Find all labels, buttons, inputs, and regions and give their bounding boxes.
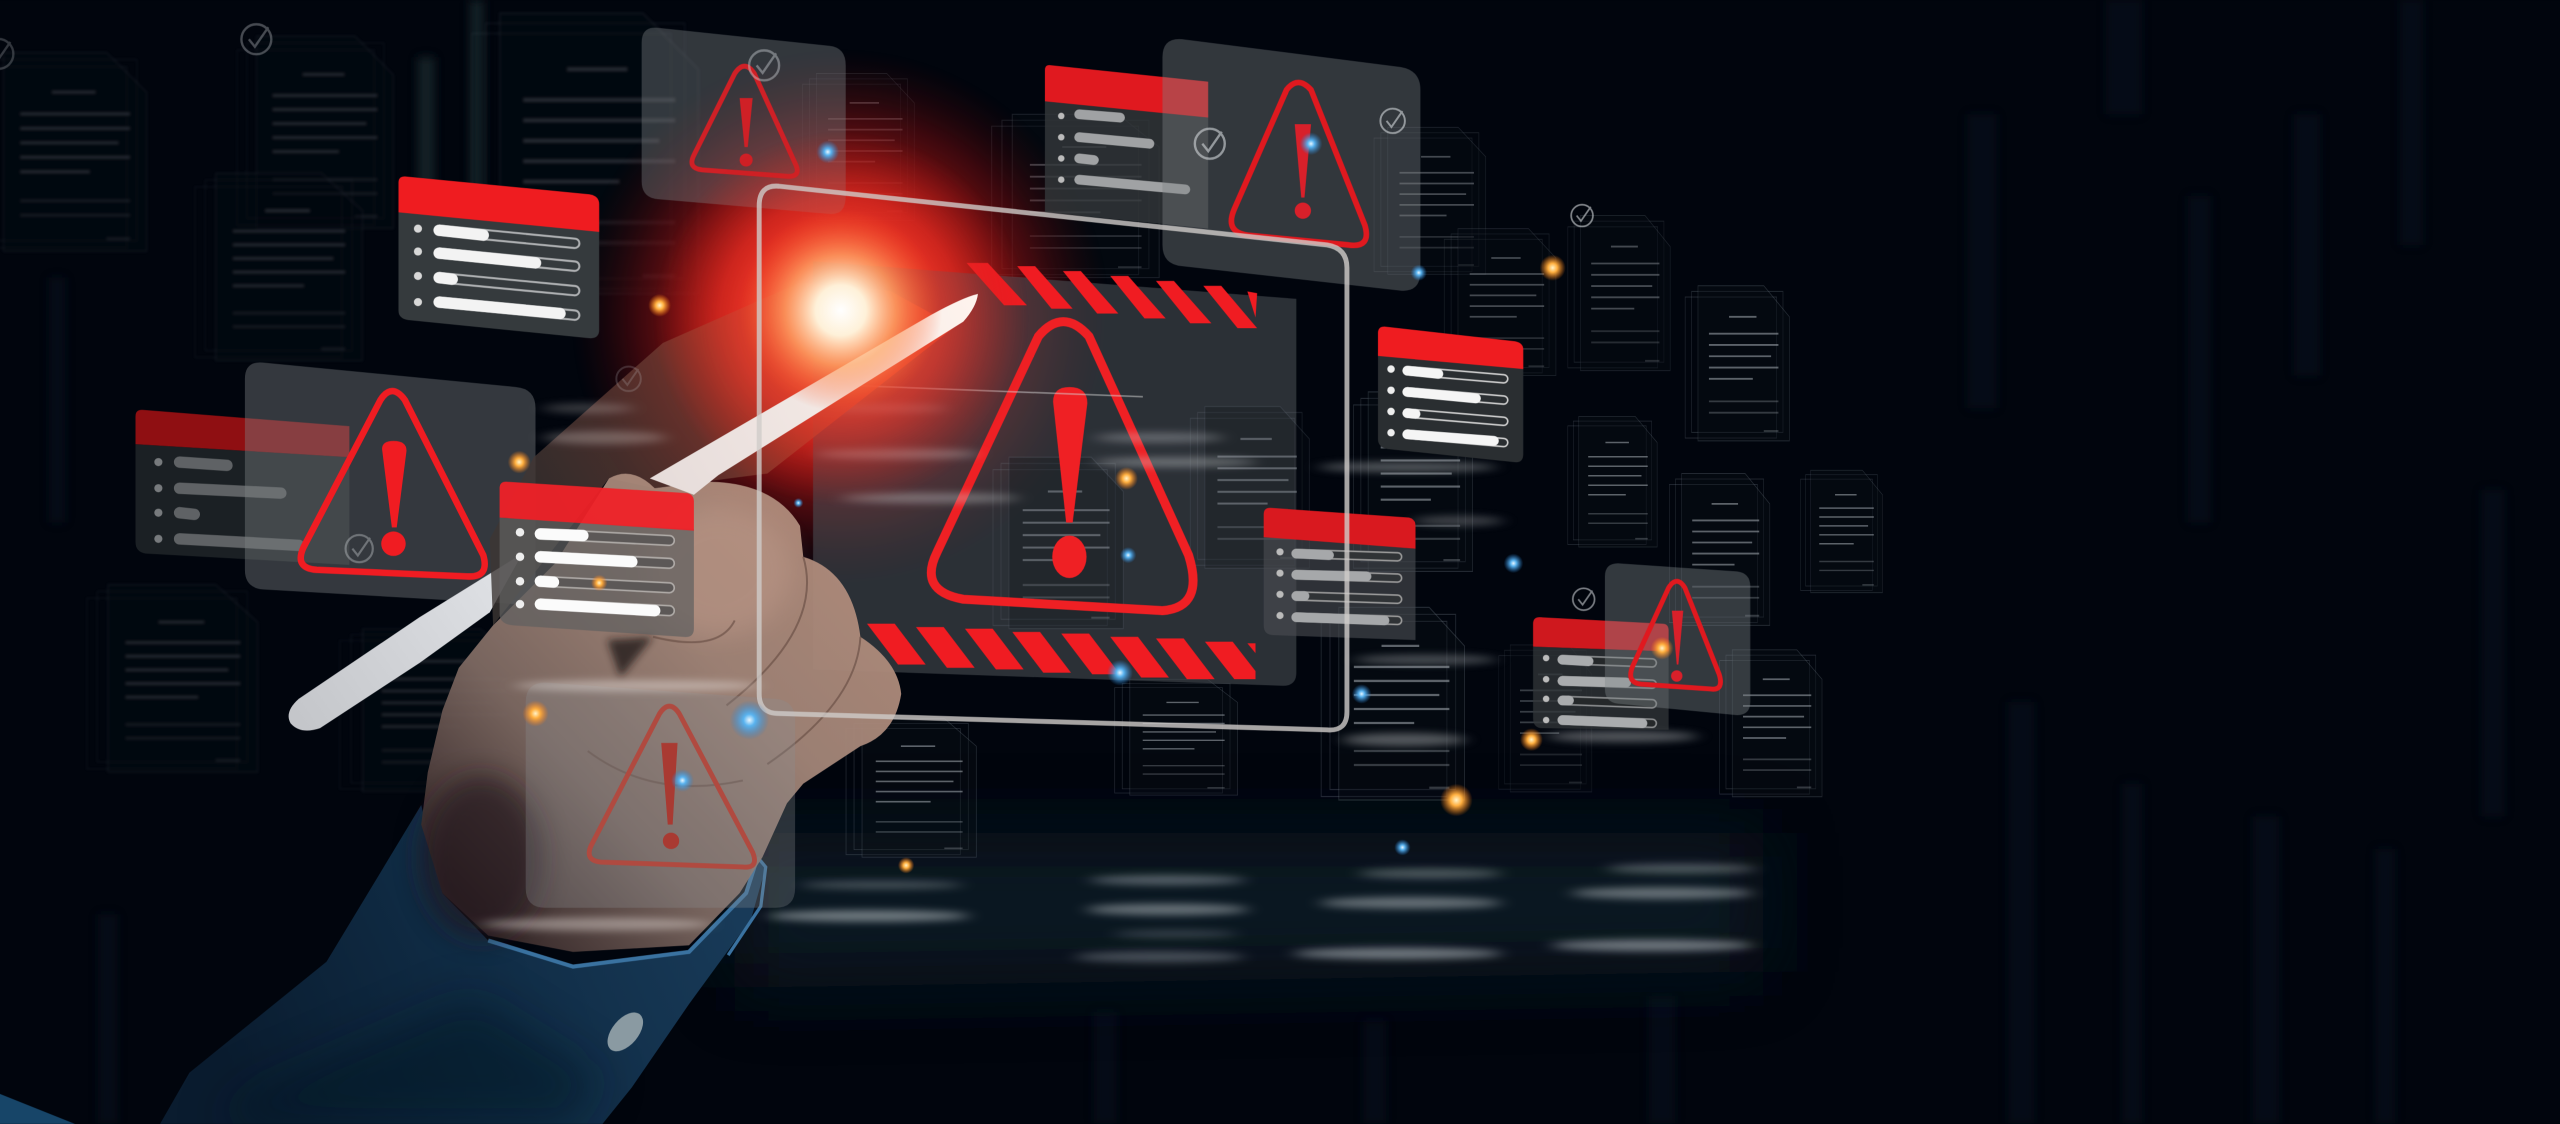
glow over finger: [653, 131, 1029, 506]
card: top-centre red list: [1045, 65, 1208, 229]
hand: palm and fingers: [420, 474, 901, 952]
background documents, dim left side: [0, 13, 699, 792]
documents seen through screen: [993, 407, 1309, 629]
background vertical bars, left: [418, 0, 483, 212]
panel: left warning glass: [245, 362, 536, 604]
card: right red list: [1378, 327, 1523, 462]
lights: blue sparks: [671, 132, 1523, 856]
motion streaks over hand: [482, 403, 759, 931]
stylus: front section: [650, 294, 978, 495]
background documents, top centre: [803, 74, 1670, 376]
card: left dim red list: [136, 410, 349, 565]
hot glow at stylus tip: [740, 209, 942, 411]
sleeve: [0, 805, 766, 1124]
card: middle red list: [1264, 508, 1416, 640]
card: top-left red list: [398, 176, 599, 338]
icon: large warning triangle: [931, 322, 1193, 611]
red glow behind stylus tip: [571, 49, 1110, 588]
panel: lower warning glass over hand: [526, 682, 795, 908]
card: lower-right red list: [1533, 617, 1669, 730]
panel: top-right warning glass: [1162, 39, 1420, 291]
hand: translucent index finger: [490, 282, 955, 625]
motion streaks across the screen: [816, 404, 1698, 746]
icons: check badges: [0, 24, 1595, 610]
panel: lower-right warning glass: [1605, 563, 1750, 715]
panel: top warning glass: [642, 28, 846, 214]
hazard stripes: top: [967, 263, 1257, 328]
lights: orange sparks: [508, 255, 1673, 874]
hazard stripes: bottom: [867, 624, 1256, 679]
panel: large warning screen: [813, 261, 1309, 686]
background documents, right side: [846, 286, 1882, 857]
card: red list over hand: [500, 482, 694, 637]
icon: cuff button: [601, 1006, 650, 1058]
reflective floor panel: [735, 833, 1763, 988]
frame: glass outline around warning screen: [759, 186, 1347, 730]
stylus: rear section: [289, 554, 522, 731]
